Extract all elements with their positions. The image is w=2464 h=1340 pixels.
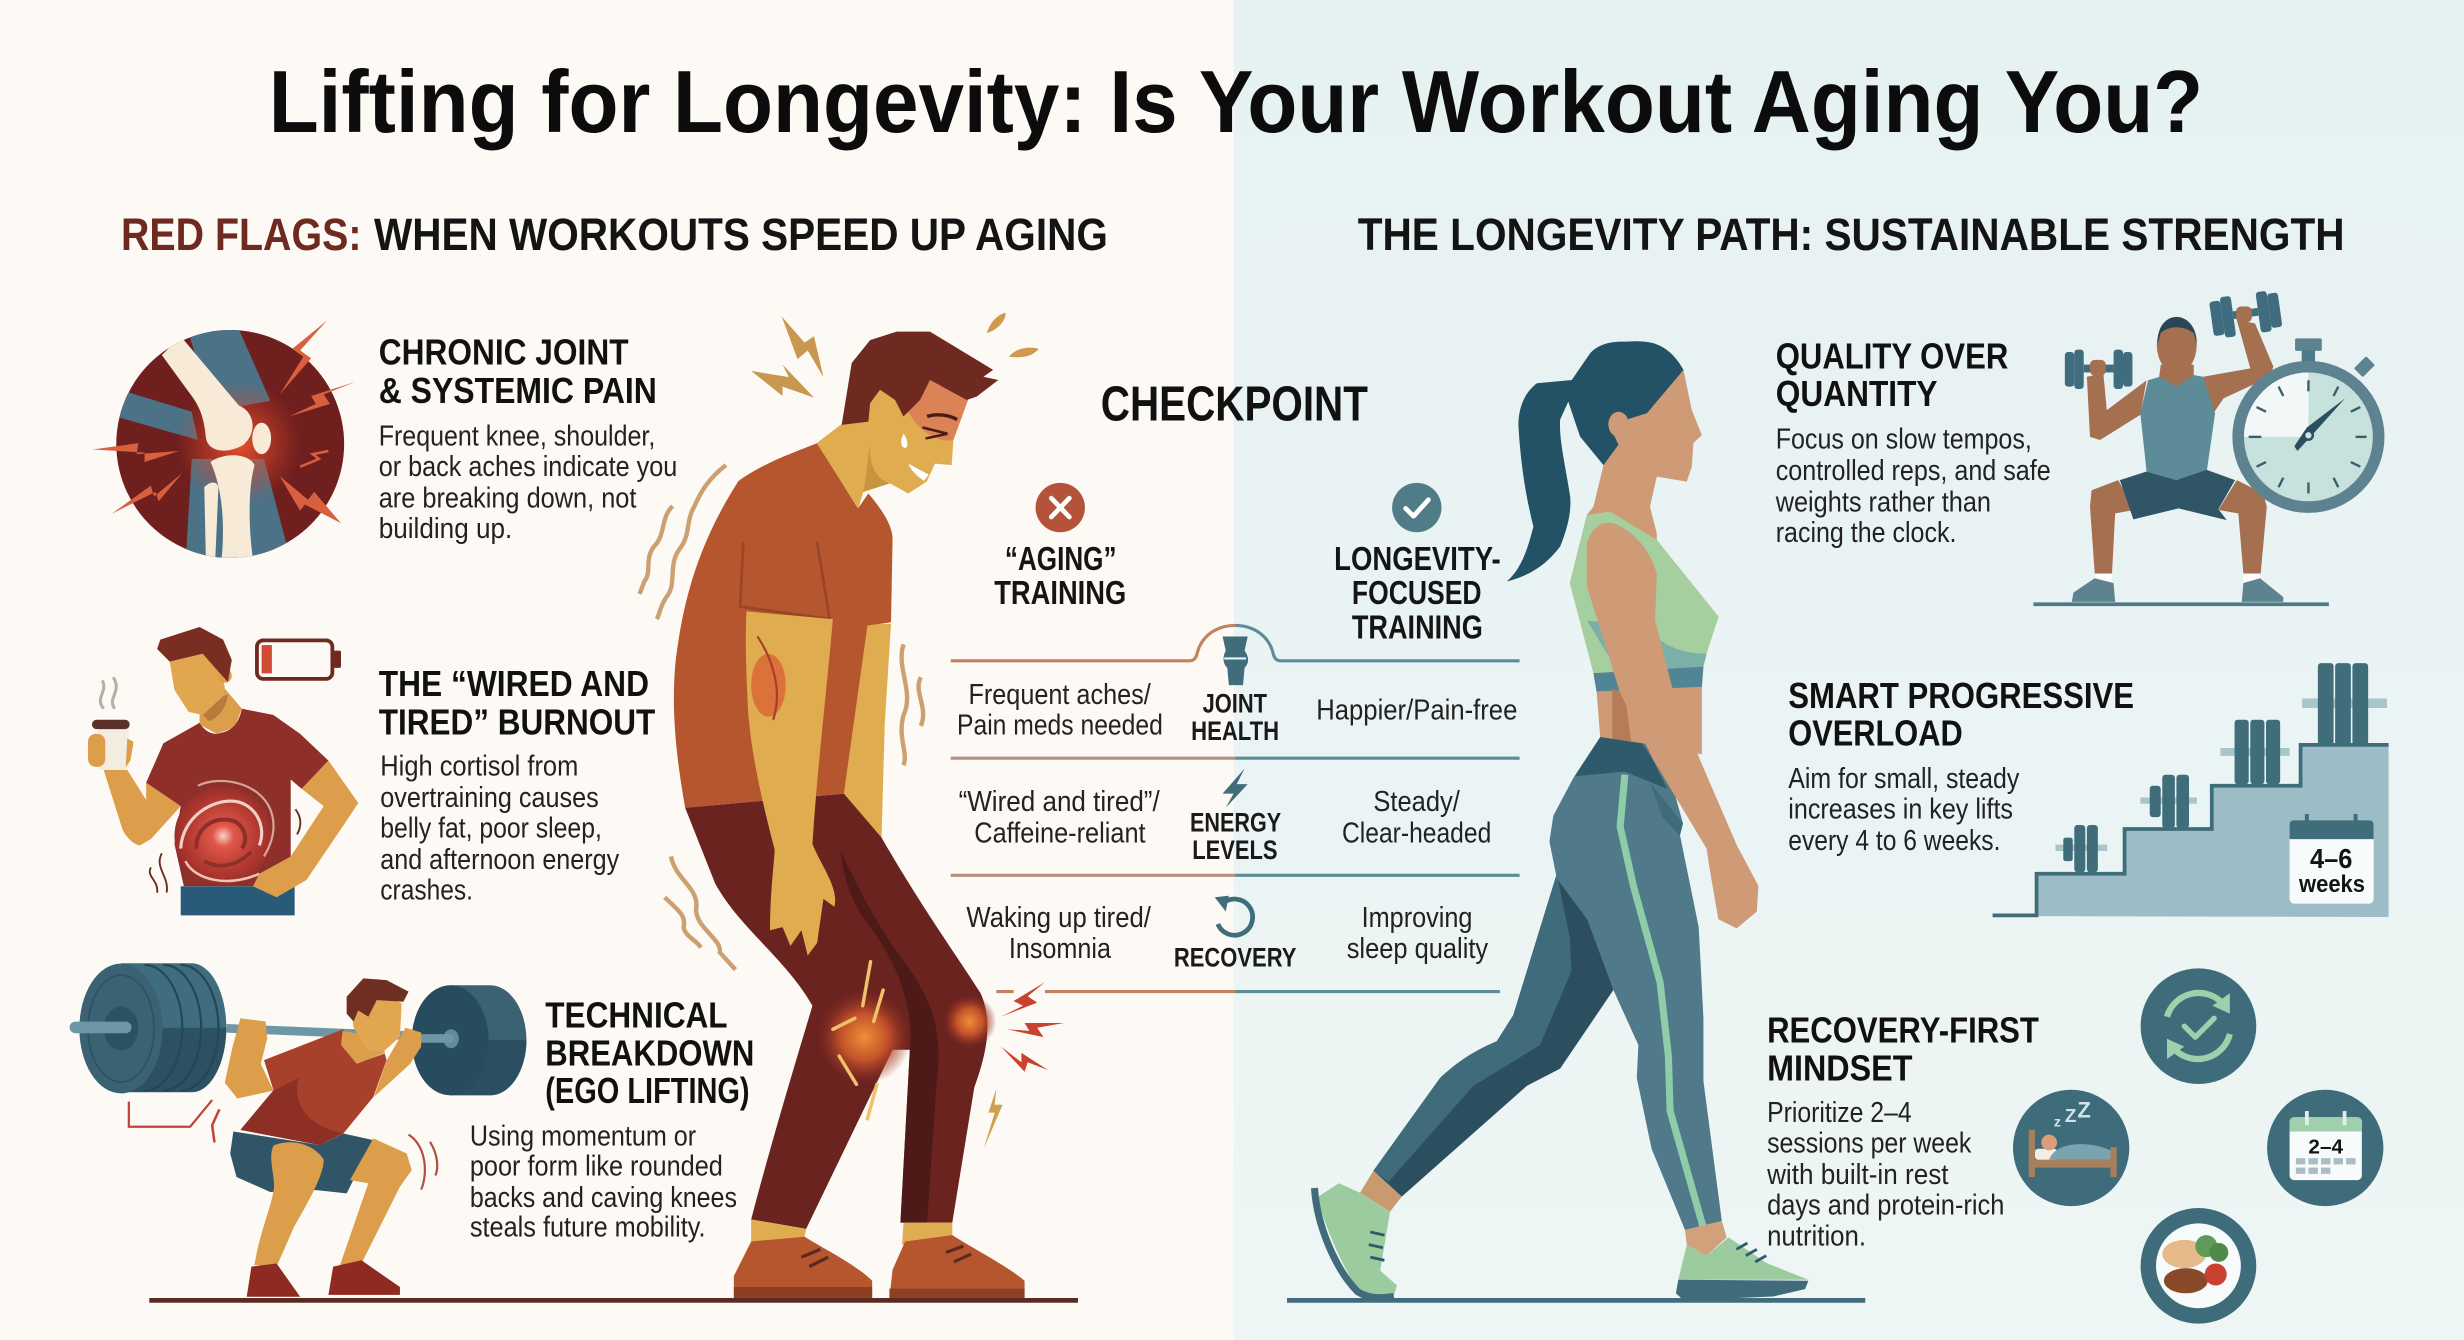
heading	[379, 663, 655, 743]
text block	[380, 751, 620, 907]
heading: longevity path: THE LONGEVITY PATH: SUSTAINABLE STRENGTH	[1358, 209, 2345, 260]
icon: recovery cycle	[2141, 968, 2256, 1084]
heading: TIRED” BURNOUT	[379, 702, 655, 743]
icon: check mark	[1392, 483, 1441, 532]
row: joint health: Pain meds needed	[957, 710, 1163, 742]
row: energy levels: Caffeine-reliant	[974, 817, 1146, 849]
text block: backs and caving knees	[470, 1182, 737, 1214]
panel: quality over quantity	[1775, 289, 2384, 606]
text block: weights rather than	[1775, 487, 1991, 519]
text block: Focus on slow tempos,	[1776, 424, 2032, 456]
heading	[1776, 336, 2008, 414]
column heading: longevity training: TRAINING	[1352, 608, 1483, 645]
row: joint health: Frequent aches/	[968, 679, 1152, 711]
text block	[1788, 763, 2020, 857]
text block: High cortisol from	[380, 751, 578, 783]
row: joint health: HEALTH	[1191, 716, 1279, 746]
column heading: aging training: TRAINING	[994, 574, 1126, 611]
icon: sleeping in bed: Z	[2077, 1097, 2091, 1122]
background: red flags side	[0, 0, 1234, 1340]
row: recovery: RECOVERY	[1174, 942, 1297, 972]
text block: controlled reps, and safe	[1776, 455, 2051, 487]
row: joint health: JOINT	[1203, 689, 1268, 719]
icon: lightning bolt	[1223, 768, 1248, 808]
row: recovery: Waking up tired/	[966, 902, 1152, 934]
heading: checkpoint: CHECKPOINT	[1101, 377, 1368, 431]
text block	[1766, 1097, 2004, 1252]
icon: burnout man with coffee	[88, 627, 358, 915]
heading: CHRONIC JOINT	[379, 332, 629, 373]
text block	[1775, 424, 2051, 549]
icon: painful knee	[93, 321, 355, 566]
column heading: aging training: “AGING”	[1005, 540, 1116, 577]
heading: red flags: RED FLAGS:	[121, 209, 361, 260]
icon: man with dumbbells and stopwatch	[2033, 289, 2384, 606]
heading: SMART PROGRESSIVE	[1788, 675, 2134, 716]
column heading: aging training	[994, 540, 1126, 611]
heading: QUALITY OVER	[1776, 336, 2008, 377]
heading	[545, 995, 754, 1111]
row: energy levels: LEVELS	[1192, 835, 1278, 865]
heading: & SYSTEMIC PAIN	[379, 370, 657, 411]
text block: crashes.	[380, 875, 473, 907]
icon: calendar 2-4	[2267, 1090, 2383, 1206]
panel: recovery-first mindset	[1766, 968, 2383, 1324]
heading: red flags	[121, 209, 1108, 260]
icon: sleeping in bed	[2013, 1090, 2129, 1206]
icon: pain marks around the man	[640, 313, 1064, 1149]
background: longevity side	[1234, 0, 2464, 1340]
icon: sleeping in bed: z	[2054, 1114, 2061, 1130]
row: recovery: Improving	[1362, 902, 1472, 934]
row: energy levels: Clear-headed	[1342, 817, 1491, 849]
text block: belly fat, poor sleep,	[380, 813, 602, 845]
title: Lifting for Longevity: Is Your Workout Aging You?	[269, 52, 2203, 151]
text block: increases in key lifts	[1788, 794, 2013, 826]
column heading: longevity training: LONGEVITY-	[1334, 540, 1501, 577]
icon: sleeping in bed: Z	[2065, 1105, 2076, 1126]
icon: recovery arrow	[1215, 896, 1253, 935]
row: energy levels	[959, 768, 1491, 865]
icon: calendar 4-6 weeks	[2290, 814, 2374, 904]
icon: x mark	[1036, 483, 1085, 532]
row: joint health	[957, 636, 1517, 746]
heading: red flags: WHEN WORKOUTS SPEED UP AGING	[374, 209, 1108, 260]
text block	[379, 421, 677, 545]
text block: every 4 to 6 weeks.	[1788, 825, 2000, 857]
text block: Prioritize 2–4	[1767, 1097, 1912, 1129]
icon: squatting man with barbell	[75, 963, 526, 1297]
row: energy levels: ENERGY	[1190, 807, 1281, 837]
text block: Frequent knee, shoulder,	[379, 421, 655, 453]
text block: sessions per week	[1767, 1128, 1972, 1160]
text block: racing the clock.	[1776, 517, 1956, 549]
heading	[1767, 1010, 2039, 1088]
icon: calendar 2-4: 2–4	[2308, 1136, 2344, 1158]
text block: days and protein-rich	[1767, 1190, 2004, 1222]
text block: with built-in rest	[1766, 1159, 1949, 1191]
column heading: longevity training	[1334, 540, 1501, 645]
icon: calendar 4-6 weeks: 4–6	[2310, 843, 2352, 874]
text block: overtraining causes	[380, 782, 599, 814]
text block: Using momentum or	[470, 1121, 696, 1153]
ground line: woman	[1287, 1298, 1865, 1303]
text block: building up.	[379, 513, 512, 545]
text block: are breaking down, not	[379, 483, 636, 515]
row: recovery	[966, 896, 1489, 972]
text block: nutrition.	[1767, 1220, 1866, 1252]
icon: low battery	[257, 640, 341, 679]
panel: checkpoint comparison	[951, 377, 1520, 992]
chart: stair steps with weights	[1993, 663, 2389, 917]
column heading: longevity training: FOCUSED	[1352, 574, 1482, 611]
icon: calendar 4-6 weeks: weeks	[2298, 871, 2365, 898]
panel: smart progressive overload	[1788, 663, 2389, 917]
heading: RECOVERY-FIRST	[1767, 1010, 2039, 1051]
row: recovery: sleep quality	[1347, 933, 1489, 965]
row: energy levels: “Wired and tired”/	[959, 786, 1161, 818]
heading: TECHNICAL	[545, 995, 728, 1036]
heading: THE “WIRED AND	[379, 663, 649, 704]
heading: QUANTITY	[1776, 373, 1938, 414]
heading: (EGO LIFTING)	[545, 1070, 750, 1111]
panel: technical breakdown	[75, 963, 754, 1297]
heading: OVERLOAD	[1788, 713, 1963, 754]
icon: knee joint	[1223, 636, 1248, 685]
heading: BREAKDOWN	[545, 1032, 754, 1073]
text block: steals future mobility.	[470, 1212, 706, 1244]
panel: wired and tired burnout	[88, 627, 655, 915]
panel: chronic joint pain	[93, 321, 677, 566]
icon: protein-rich plate	[2141, 1208, 2256, 1324]
text block: or back aches indicate you	[379, 451, 677, 483]
text block: poor form like rounded	[470, 1150, 723, 1182]
row: energy levels: Steady/	[1373, 786, 1461, 818]
text block	[470, 1121, 737, 1244]
row: recovery: Insomnia	[1009, 933, 1112, 965]
heading: MINDSET	[1767, 1047, 1912, 1088]
figure: man bent over in pain	[674, 332, 1025, 1298]
heading	[1788, 675, 2134, 754]
figure: woman walking	[1314, 341, 1808, 1300]
heading	[379, 332, 657, 411]
text block: and afternoon energy	[380, 844, 620, 876]
row: joint health: Happier/Pain-free	[1316, 694, 1517, 726]
text block: Aim for small, steady	[1788, 763, 2020, 795]
ground line: left side	[149, 1298, 1078, 1303]
